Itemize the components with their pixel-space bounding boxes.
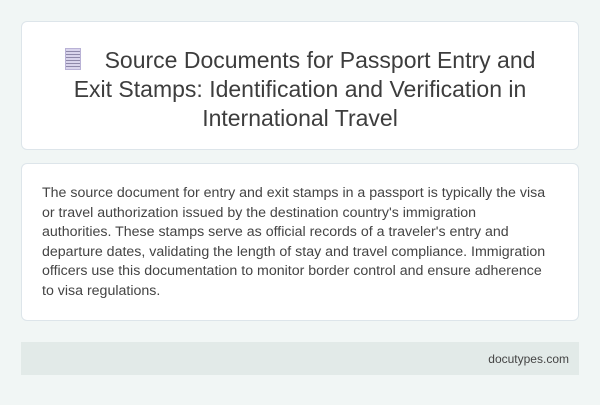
description text: The source document for entry and exit stamps in a passport is typically the visa or travel authorization issued by the destination country's immigration authorities. These stamps serve as official records of a traveler's entry and departure dates, validating the length of stay and travel compliance. Immigration officers use this documentation to monitor border control and ensure adherence to visa regulations. xyxy=(42,185,545,298)
icon: document xyxy=(65,48,81,70)
title panel xyxy=(21,21,579,150)
description panel xyxy=(21,163,579,321)
footer bar xyxy=(21,342,579,375)
title: Source Documents for Passport Entry and Exit Stamps: Identification and Verification in International Travel xyxy=(74,47,535,131)
footer credit: docutypes.com xyxy=(488,352,569,366)
